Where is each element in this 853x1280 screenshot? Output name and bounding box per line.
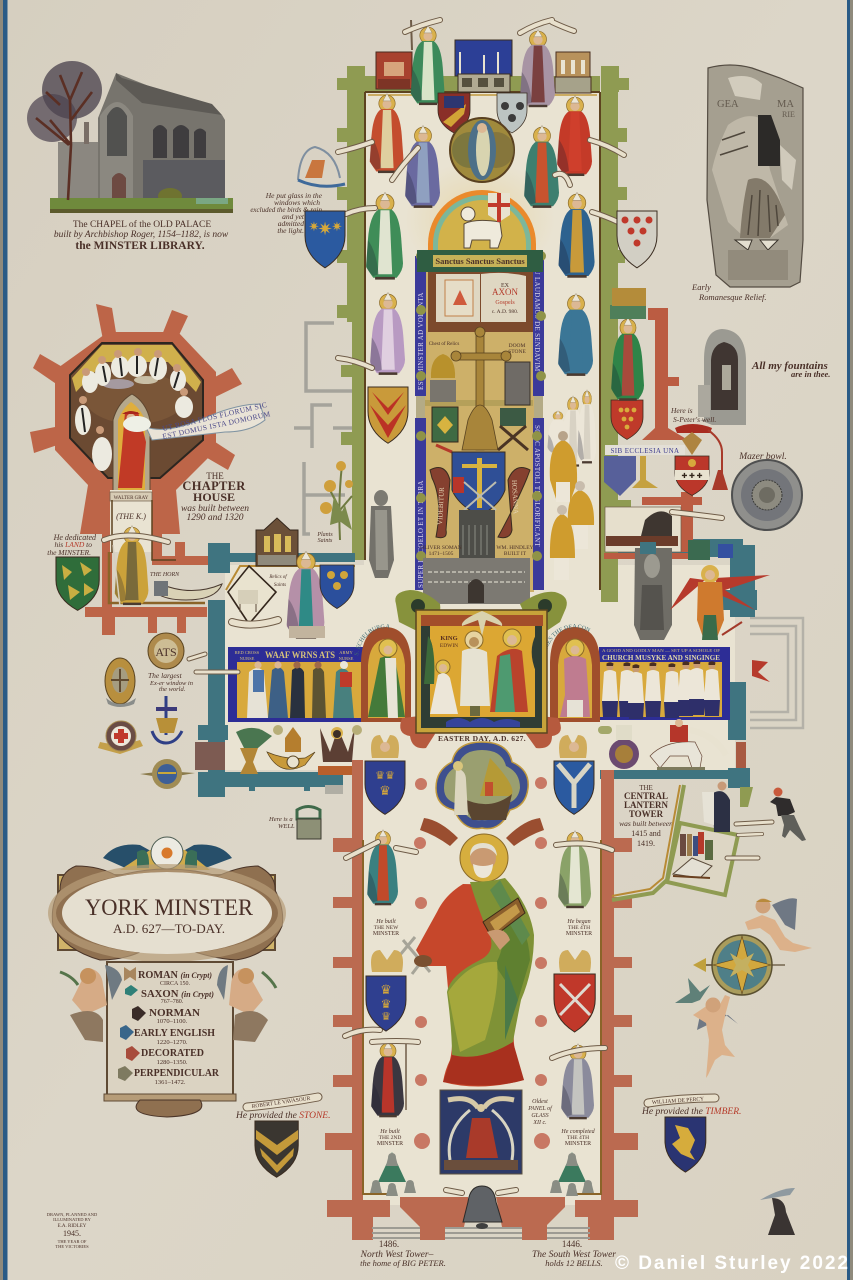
dedication text: the MINSTER. bbox=[47, 548, 91, 557]
purple bishop left bbox=[405, 125, 440, 208]
clergy procession bbox=[548, 390, 596, 580]
shield: green with gold lions bbox=[56, 557, 99, 610]
legend panel: DECORATED bbox=[141, 1048, 204, 1059]
Hosanna scroll: HOSANNA bbox=[510, 480, 520, 514]
lower cherub bbox=[675, 978, 738, 1078]
chapter house caption bbox=[181, 471, 249, 523]
glass text and scene: the light. bbox=[277, 226, 304, 235]
open gospel book: AXON bbox=[492, 287, 518, 297]
arched niche: St Ethelburga bbox=[354, 624, 411, 722]
shields along the choir bbox=[305, 211, 657, 443]
Tudor rose crest bbox=[103, 837, 232, 870]
mitre reliquary bbox=[430, 354, 456, 402]
tree bbox=[27, 61, 102, 200]
right transept chapels bbox=[640, 540, 733, 560]
scroll: rosa flos florum bbox=[123, 400, 271, 441]
red robe bbox=[416, 884, 525, 1087]
lantern tower stair structure bbox=[612, 782, 772, 900]
top altars bbox=[376, 40, 591, 93]
printer's note bottom left: 1945. bbox=[63, 1229, 81, 1238]
legend panel: PERPENDICULAR bbox=[134, 1068, 219, 1079]
book bbox=[483, 898, 525, 938]
Romanesque relief: MA bbox=[777, 99, 794, 110]
red saint right bbox=[557, 96, 592, 176]
halo bbox=[460, 834, 508, 882]
Paulinus bbox=[490, 629, 528, 712]
legend panel bbox=[104, 962, 236, 1117]
teal bishop builder: THE NEW bbox=[374, 925, 399, 931]
green book bbox=[432, 407, 458, 452]
nave red walls bbox=[325, 760, 638, 1240]
lozenge lamb bbox=[228, 566, 276, 624]
right annex red walls bbox=[604, 308, 702, 559]
grey bishop: THE 4TH bbox=[567, 1135, 589, 1141]
note scrolls bbox=[232, 575, 287, 625]
grey bishop: He completed bbox=[560, 1129, 596, 1135]
lamb of God arch bbox=[428, 190, 536, 250]
Saint Michael bbox=[670, 565, 770, 640]
glass text and scene: He put glass in the bbox=[265, 191, 323, 200]
shrine bbox=[256, 518, 298, 566]
red saint left bbox=[370, 94, 403, 173]
vestibule corridor bbox=[109, 490, 205, 603]
thistle plant: Saints bbox=[318, 538, 333, 544]
teal bishop builder: He built bbox=[375, 919, 396, 925]
glass text and scene: windows which bbox=[274, 198, 320, 207]
Hosanna scroll bbox=[498, 468, 530, 538]
red-robed king: He built bbox=[379, 1129, 400, 1135]
fountains quote: All my fountains bbox=[751, 360, 828, 372]
arched niche: James the Deacon: JAMES THE DEACON bbox=[548, 624, 591, 649]
Robert le Vavasour banner and stone shield bbox=[235, 1096, 330, 1177]
chapel caption: the MINSTER LIBRARY. bbox=[75, 240, 205, 252]
legend panel: CIRCA 150. bbox=[160, 981, 190, 987]
left cherub bbox=[60, 965, 122, 1042]
inscribed blue jambs: EST MINSTER AD VOLANTA bbox=[417, 292, 425, 390]
printer's note bottom left: ILLUMINATED BY bbox=[53, 1217, 92, 1222]
west screen facade bbox=[423, 558, 530, 604]
largest window note: the world. bbox=[159, 686, 186, 693]
Easter day caption: EASTER DAY, A.D. 627. bbox=[438, 734, 526, 743]
glass text and scene: excluded the birds & rain bbox=[250, 206, 322, 214]
top bishops bbox=[405, 20, 574, 107]
nave heraldic shields bbox=[366, 950, 595, 1032]
open gospel book bbox=[428, 272, 533, 332]
legend panel: 1220–1270. bbox=[157, 1039, 188, 1046]
dark robe base bbox=[443, 1042, 524, 1086]
RAF wings badge bbox=[140, 759, 195, 789]
Videbitur scroll bbox=[430, 468, 450, 538]
badges left of transept bbox=[98, 633, 238, 789]
Videbitur scroll: VIDEBITUR bbox=[436, 487, 446, 525]
legend panel: NORMAN bbox=[149, 1008, 200, 1019]
relief caption: Early bbox=[691, 282, 711, 292]
compass bbox=[693, 935, 785, 995]
Choir school panel: CHURCH MUSYKE AND SINGINGE bbox=[602, 653, 720, 662]
north transept room bbox=[150, 518, 355, 644]
servicewomen bbox=[247, 661, 354, 718]
well note bbox=[268, 806, 321, 839]
fountains quote: are in thee. bbox=[791, 369, 830, 379]
baptism scene: KING bbox=[440, 635, 458, 642]
shield: three gold roundels on blue bbox=[320, 565, 354, 608]
concentric square with dragon bbox=[752, 660, 770, 682]
glass text and scene: admitted bbox=[278, 219, 304, 228]
Choir school panel bbox=[599, 647, 730, 720]
green mantle bbox=[447, 878, 534, 1057]
treasures bbox=[429, 342, 530, 452]
red-brown scroll flourishes bbox=[420, 818, 544, 846]
printer's note bottom left bbox=[47, 1212, 98, 1249]
stained octagon of the chapter bbox=[70, 343, 203, 478]
Oldest panel of glass: XII c. bbox=[532, 1120, 547, 1126]
seated clerics bbox=[75, 355, 193, 471]
west towers text: the home of BIG PETER. bbox=[360, 1258, 446, 1268]
legend panel: SAXON (in Crypt) bbox=[141, 989, 214, 1000]
lilac bishop bbox=[370, 292, 405, 375]
treasures: DOOM bbox=[509, 343, 526, 349]
relief caption: Romanesque Relief. bbox=[698, 292, 767, 302]
William de Percy banner and timber shield bbox=[641, 1096, 741, 1172]
title: YORK MINSTER bbox=[85, 895, 254, 920]
angel and shield: three crowns bbox=[365, 735, 405, 814]
choir saints bbox=[366, 94, 595, 376]
back frame bbox=[58, 875, 275, 950]
altar servers bbox=[548, 390, 596, 467]
inscribed blue jambs: SUPER IN COELO ET IN TERRA bbox=[417, 480, 425, 588]
Romanesque relief: RIE bbox=[782, 110, 795, 119]
open gospel book: EX bbox=[501, 283, 510, 289]
red cross badge bbox=[98, 721, 143, 754]
green bishop bbox=[558, 831, 592, 937]
regimental badge bbox=[598, 725, 639, 769]
vestibule corridor: (THE K.) bbox=[116, 512, 146, 521]
blue altar centre bbox=[455, 40, 512, 92]
chapter house caption: was built between bbox=[181, 504, 249, 514]
treasures: STONE bbox=[508, 349, 526, 355]
fountains quote: Here is bbox=[670, 406, 693, 415]
York Minster title cartouche bbox=[52, 837, 283, 1117]
ship quatrefoil bbox=[436, 742, 528, 829]
angel and shield: three crowns: ♛♛ bbox=[375, 770, 395, 782]
note scrolls: Saints bbox=[274, 583, 286, 588]
figure with horn and staff bbox=[104, 526, 168, 606]
green bishop: THE 4TH bbox=[568, 925, 590, 931]
relief caption bbox=[691, 282, 767, 302]
Oldest panel of glass: Oldest bbox=[532, 1099, 548, 1105]
grey knight tomb figure bbox=[369, 490, 394, 578]
bell trees bbox=[370, 1152, 594, 1196]
arched niche: St Ethelburga: S. ECHELBURGA bbox=[354, 624, 390, 656]
blue-green bishop right bbox=[524, 125, 559, 208]
WAAF WRNS ATS panel: WAAF WRNS ATS bbox=[265, 651, 335, 661]
scribe desk bbox=[605, 507, 722, 552]
Robert le Vavasour banner and stone shield: He provided the STONE. bbox=[235, 1111, 330, 1121]
William de Percy banner and timber shield: WILLIAM DE PERCY bbox=[652, 1096, 704, 1106]
high altar glass panel: OLIVER SOMAN bbox=[420, 545, 462, 551]
oval badge bbox=[105, 658, 136, 707]
Una ecclesia banner and quartered shield bbox=[604, 445, 685, 496]
dedication text: his LAND to bbox=[54, 540, 92, 549]
legend panel: 767–780. bbox=[161, 999, 184, 1005]
grey plan outlines bbox=[294, 323, 803, 728]
baptism scene bbox=[416, 610, 547, 733]
legend panel: 1361–1472. bbox=[155, 1079, 186, 1086]
well note: WELL bbox=[278, 823, 295, 830]
angel and shield: three crowns: ♛ bbox=[379, 783, 391, 798]
shield: red with gold roundels bbox=[611, 400, 643, 439]
dedication horn: THE HORN bbox=[150, 572, 180, 578]
right side green bishop bbox=[610, 288, 646, 401]
Robert le Vavasour banner and stone shield: ROBERT LE VAVASOUR bbox=[251, 1096, 311, 1110]
dedication text bbox=[47, 533, 97, 557]
chancel shields bbox=[438, 93, 527, 133]
St George on horse bbox=[650, 719, 726, 770]
William de Percy banner and timber shield: He provided the TIMBER. bbox=[641, 1107, 741, 1117]
inscribed blue jambs bbox=[415, 251, 546, 590]
chapter house bbox=[30, 304, 271, 635]
dragon crest bbox=[236, 728, 272, 774]
high altar glass panel bbox=[415, 250, 546, 604]
largest window note: Ex-er window in bbox=[149, 680, 193, 687]
subtitle: A.D. 627—TO-DAY. bbox=[113, 922, 225, 936]
WAAF WRNS ATS panel: NURSE bbox=[240, 656, 255, 661]
anchor badge bbox=[152, 696, 182, 743]
angel over three crowns: ♛ bbox=[380, 982, 392, 997]
chapel caption: built by Archbishop Roger, 1154–1182, is now bbox=[54, 230, 229, 240]
printer's note bottom left: THE VICTORIES bbox=[55, 1244, 89, 1249]
red-robed king bbox=[371, 1040, 406, 1147]
angel over three crowns: ♛ bbox=[381, 997, 391, 1011]
bishop with swan bbox=[558, 293, 593, 376]
central lantern tower text: was built between bbox=[619, 819, 673, 828]
chapel of the old palace illustration bbox=[27, 61, 233, 213]
bishop with crozier north transept bbox=[287, 551, 325, 639]
fountains quote bbox=[670, 360, 830, 424]
nave scrolls bbox=[345, 842, 612, 1058]
chapter house caption: THE bbox=[206, 471, 224, 481]
central lantern tower text bbox=[619, 784, 673, 848]
archbishop arms on glass bbox=[452, 452, 505, 516]
thistle plant bbox=[316, 461, 353, 544]
high altar glass panel: 1471–1505 bbox=[429, 551, 454, 557]
west towers text bbox=[360, 1239, 616, 1268]
Choir school panel: A GOOD AND GODLY MAN — SET UP A SCHOLE OF bbox=[602, 648, 721, 653]
angel over three crowns bbox=[366, 950, 406, 1031]
central crossing corner quatrefoils bbox=[395, 590, 567, 748]
vestibule corridor: WALTER GRAY bbox=[114, 496, 149, 501]
fountains quote: S-Peter's well. bbox=[673, 415, 716, 424]
legend panel: EARLY ENGLISH bbox=[134, 1028, 215, 1039]
west towers text: The South West Tower bbox=[532, 1250, 616, 1260]
dedication text: He dedicated bbox=[53, 533, 97, 542]
mazer bowl bbox=[732, 452, 802, 530]
thistle plant: Plants bbox=[316, 532, 333, 538]
green bishop: He began bbox=[566, 919, 591, 925]
teal bishop builder bbox=[367, 830, 399, 937]
chapel caption: The CHAPEL of the OLD PALACE bbox=[73, 219, 211, 230]
grey bishop bbox=[560, 1044, 596, 1147]
WAAF WRNS ATS panel: NURSE bbox=[339, 656, 354, 661]
books bbox=[680, 834, 686, 856]
central lantern tower text: LANTERN bbox=[624, 800, 668, 810]
WAAF WRNS ATS panel bbox=[228, 647, 363, 722]
high altar glass panel: WM. HINDLEY bbox=[496, 545, 534, 551]
niche with red cardinal bbox=[113, 394, 150, 492]
chapter house caption: 1290 and 1320 bbox=[186, 513, 244, 523]
central lantern tower text: 1415 and bbox=[631, 829, 661, 838]
Una ecclesia banner and quartered shield: SIB ECCLESIA UNA bbox=[610, 447, 680, 455]
central lantern tower text: TOWER bbox=[629, 809, 664, 819]
pillar roundels bbox=[414, 777, 550, 1149]
angel and shield: crossed Y bbox=[554, 735, 594, 814]
inscribed blue jambs: SC AC APOSTOLI TE GLORIFICANT bbox=[533, 425, 541, 547]
legend panel: 1280–1350. bbox=[157, 1059, 188, 1066]
Romanesque relief: GEA bbox=[717, 99, 739, 110]
west towers text: 1486. bbox=[379, 1239, 399, 1249]
WAAF WRNS ATS panel: ARMY bbox=[339, 650, 353, 655]
floor plan interior bbox=[225, 90, 735, 1205]
scroll oval bbox=[52, 866, 283, 960]
nave small figures bbox=[367, 830, 596, 1147]
printer's note bottom left: DRAWN, PLANNED AND bbox=[47, 1212, 98, 1218]
legend entries: ROMAN (in Crypt) bbox=[138, 970, 212, 981]
treasures: Chest of Relics bbox=[429, 342, 459, 347]
transept walls (teal) bbox=[195, 539, 757, 807]
bugle and crown badge bbox=[267, 727, 315, 769]
red-robed king: MINSTER bbox=[377, 1141, 403, 1147]
largest window note bbox=[148, 654, 238, 693]
priests in gold copes bbox=[550, 431, 594, 580]
transept crests, north bbox=[236, 725, 362, 775]
chapel caption bbox=[54, 219, 229, 252]
choir walls (green) bbox=[337, 66, 631, 602]
green bishop bbox=[366, 192, 403, 280]
chair bbox=[498, 408, 528, 450]
choir boys bbox=[602, 660, 720, 719]
shield: blue with gold stars: ✷ bbox=[309, 219, 320, 234]
ATS badge bbox=[148, 633, 184, 669]
inscribed blue jambs: TU LAUDAMUS DE SENDAVIM bbox=[533, 265, 541, 372]
angel over three crowns: ♛ bbox=[381, 1011, 391, 1023]
teal bishop builder: MINSTER bbox=[373, 931, 399, 937]
printer's note bottom left: THE YEAR OF bbox=[58, 1239, 87, 1244]
mazer bowl: Mazer bowl. bbox=[738, 452, 787, 462]
note scrolls: Relics of bbox=[268, 575, 287, 580]
largest window note: The largest bbox=[148, 671, 183, 680]
organ bbox=[459, 510, 495, 558]
glass text and scene bbox=[250, 147, 345, 235]
west towers text: North West Tower– bbox=[360, 1250, 434, 1260]
running figure bbox=[770, 788, 806, 841]
shield: silver with red roundels bbox=[617, 211, 657, 268]
Holy Spirit dove bbox=[462, 611, 502, 636]
silver book bbox=[505, 362, 530, 405]
baptism scene: EDWIN bbox=[440, 643, 458, 649]
central lantern tower text: CENTRAL bbox=[624, 791, 668, 801]
winged eagle bbox=[318, 726, 355, 775]
scholar in black bbox=[713, 791, 730, 832]
keys bbox=[400, 937, 430, 974]
arched niche: James the Deacon bbox=[548, 624, 600, 722]
Sanctus banner: Sanctus Sanctus Sanctus bbox=[435, 256, 525, 266]
great bell bbox=[446, 1186, 516, 1229]
Saint Peter bbox=[400, 834, 534, 1087]
west front stone stripes bbox=[372, 1228, 590, 1238]
Cardinal arms bbox=[675, 424, 728, 495]
shield: blue with gold stars: ✷ bbox=[317, 219, 333, 239]
red altar left bbox=[376, 52, 412, 89]
green bishop: MINSTER bbox=[566, 931, 592, 937]
chapter house caption: HOUSE bbox=[193, 490, 235, 504]
central lantern tower text: THE bbox=[639, 784, 653, 792]
scroll: rosa flos florum: EST DOMUS ISTA DOMORUM bbox=[162, 409, 271, 441]
open gospel book: Gospels bbox=[495, 300, 515, 306]
grey bishop: MINSTER bbox=[565, 1141, 591, 1147]
right cherub bbox=[217, 965, 276, 1042]
WAAF WRNS ATS panel: RED CROSS bbox=[235, 650, 260, 655]
Romanesque relief bbox=[707, 65, 803, 287]
well note: Here is a bbox=[268, 816, 293, 823]
blue bishop bbox=[559, 192, 595, 278]
upper cherub bbox=[745, 898, 812, 952]
child in white bbox=[430, 660, 458, 714]
legend keys bbox=[124, 967, 136, 981]
water bbox=[446, 718, 520, 727]
shield: blue with gold stars bbox=[305, 211, 345, 268]
legend panel: 1070–1100. bbox=[157, 1018, 188, 1025]
open gospel book: c. A.D. 980. bbox=[492, 309, 519, 315]
bottom right hooded figure bbox=[760, 1188, 795, 1235]
Oldest panel of glass: GLASS bbox=[531, 1113, 549, 1119]
glass text and scene: and yet bbox=[282, 212, 305, 221]
central lantern tower text: 1419. bbox=[637, 839, 655, 848]
Sanctus banner bbox=[417, 250, 543, 272]
Cardinal arms: ✚ ✚ ✚ bbox=[681, 472, 703, 480]
high altar glass panel: BUILT IT bbox=[504, 551, 527, 557]
angel over crossed keys bbox=[554, 950, 595, 1032]
red-robed king: THE 2ND bbox=[379, 1135, 401, 1141]
choir scrolls bbox=[338, 140, 624, 368]
Virgin in glory roundel bbox=[450, 118, 514, 182]
St Peter's well window bbox=[698, 329, 746, 425]
dedication horn bbox=[150, 572, 222, 600]
transept crests, south bbox=[598, 719, 726, 770]
Oldest panel of glass bbox=[440, 1090, 553, 1174]
processional cross bbox=[451, 327, 511, 450]
head and beard bbox=[470, 845, 496, 871]
photographer credit: © Daniel Sturley 2022 bbox=[615, 1253, 848, 1274]
west towers text: 1446. bbox=[562, 1239, 582, 1249]
compass rose with cherubs bbox=[675, 898, 812, 1078]
gold altar right bbox=[555, 52, 591, 93]
red walls and buttresses bbox=[30, 304, 242, 635]
Oldest panel of glass: PANEL of bbox=[527, 1105, 553, 1112]
chapter house caption: CHAPTER bbox=[182, 479, 246, 493]
nave shields under the transept bbox=[365, 735, 594, 814]
printer's note bottom left: E.A. RIDLEY bbox=[58, 1224, 87, 1229]
grey carved statue bbox=[634, 548, 672, 640]
King Edwin bbox=[460, 631, 490, 716]
shield: blue with gold stars: ✷ bbox=[332, 219, 343, 234]
robed figure bbox=[712, 116, 788, 238]
shield: red and gold lozenges bbox=[368, 387, 408, 443]
scroll: rosa flos florum: UT ROSA FLOS FLORUM SIC bbox=[161, 400, 268, 433]
west towers text: holds 12 BELLS. bbox=[545, 1258, 603, 1268]
ATS badge: ATS bbox=[155, 645, 177, 659]
